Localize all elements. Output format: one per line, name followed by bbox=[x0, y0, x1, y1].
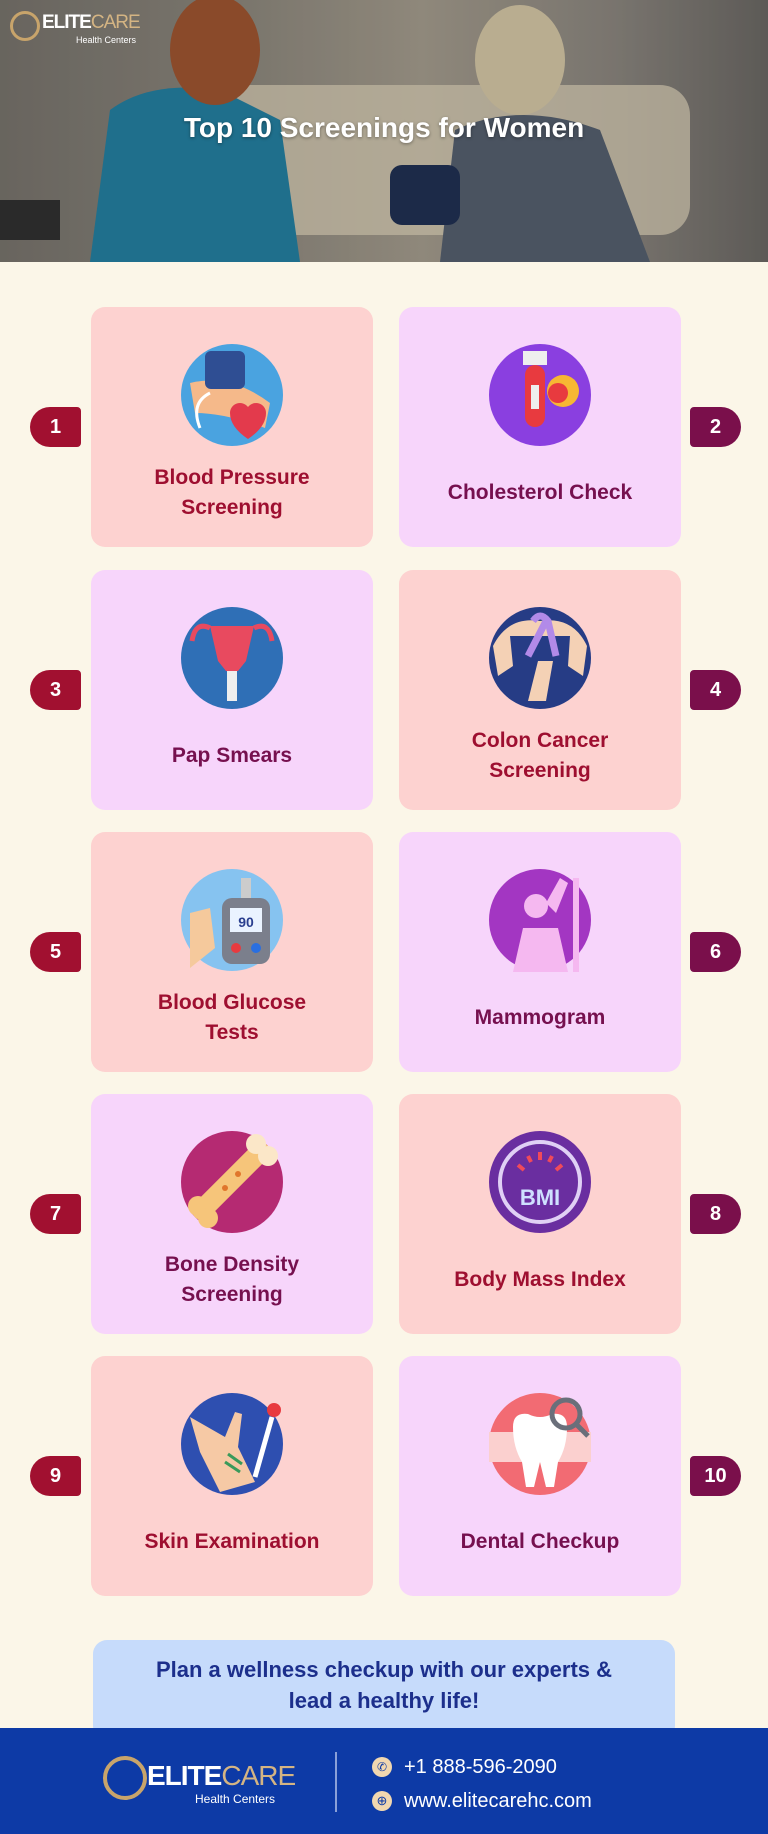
contact: web: ⊕ bbox=[377, 1793, 387, 1808]
callout: CTA: Plan a wellness checkup with our experts & bbox=[156, 1657, 612, 1682]
badge 6: 6 bbox=[710, 940, 721, 962]
icon: skin bbox=[181, 1393, 283, 1495]
label bbox=[472, 729, 608, 782]
badge 10 bbox=[690, 1456, 741, 1496]
icon: colon ribbon bbox=[489, 607, 591, 709]
logo: top bbox=[10, 11, 140, 45]
divider bbox=[335, 1752, 337, 1812]
hero photo bbox=[0, 0, 768, 262]
callout: CTA: lead a healthy life! bbox=[289, 1688, 479, 1713]
label: Colon Cancer bbox=[472, 729, 608, 752]
icon: blood pressure bbox=[181, 344, 283, 446]
footer logo bbox=[103, 1756, 295, 1806]
card 6 bbox=[399, 832, 681, 1072]
logo: top: Health Centers bbox=[76, 35, 136, 45]
badge 9 bbox=[30, 1456, 81, 1496]
card 3 bbox=[91, 570, 373, 810]
label: Body Mass Index bbox=[454, 1268, 626, 1291]
label: Pap Smears bbox=[172, 744, 292, 767]
card 1 bbox=[91, 307, 373, 547]
label: Cholesterol Check bbox=[448, 481, 632, 504]
icon: BMI gauge bbox=[489, 1131, 591, 1233]
label: Screening bbox=[181, 1283, 283, 1306]
label: Screening bbox=[489, 759, 591, 782]
icon: uterus bbox=[181, 607, 283, 709]
label: Dental Checkup bbox=[461, 1530, 619, 1553]
badge 6 bbox=[690, 932, 741, 972]
badge 5 bbox=[30, 932, 81, 972]
contact: phone: +1 888-596-2090 bbox=[404, 1756, 557, 1778]
icon: mammogram bbox=[489, 869, 591, 972]
label: Bone Density bbox=[165, 1253, 299, 1276]
card 8 bbox=[399, 1094, 681, 1334]
badge 7: 7 bbox=[50, 1202, 61, 1224]
badge 4 bbox=[690, 670, 741, 710]
badge 9: 9 bbox=[50, 1464, 61, 1486]
badge 1: 1 bbox=[50, 416, 61, 438]
icon: glucose meter bbox=[181, 869, 283, 971]
badge 1 bbox=[30, 407, 81, 447]
label bbox=[165, 1253, 299, 1306]
card 2 bbox=[399, 307, 681, 547]
icon: BMI gauge: BMI bbox=[520, 1185, 560, 1210]
card 9 bbox=[91, 1356, 373, 1596]
label: Blood Pressure bbox=[154, 466, 310, 489]
label: Blood Glucose bbox=[158, 991, 306, 1014]
card 4 bbox=[399, 570, 681, 810]
label: Skin Examination bbox=[144, 1530, 320, 1553]
card 10 bbox=[399, 1356, 681, 1596]
footer logo: Health Centers bbox=[195, 1792, 275, 1806]
label: Mammogram bbox=[475, 1006, 605, 1029]
label bbox=[154, 466, 310, 519]
footer logo: ELITECARE bbox=[147, 1760, 295, 1791]
badge 3: 3 bbox=[50, 678, 61, 700]
icon: cholesterol bbox=[489, 344, 591, 446]
icon: tooth bbox=[489, 1393, 591, 1495]
card 5 bbox=[91, 832, 373, 1072]
card 7 bbox=[91, 1094, 373, 1334]
badge 10: 10 bbox=[704, 1464, 727, 1486]
badge 8 bbox=[690, 1194, 741, 1234]
contact: web: www.elitecarehc.com bbox=[404, 1790, 592, 1812]
badge 8: 8 bbox=[710, 1202, 721, 1224]
icon: glucose meter: 90 bbox=[238, 914, 254, 930]
badge 7 bbox=[30, 1194, 81, 1234]
badge 4: 4 bbox=[710, 678, 721, 700]
badge 3 bbox=[30, 670, 81, 710]
badge 2: 2 bbox=[710, 416, 721, 438]
logo: top: ELITECARE bbox=[42, 12, 140, 33]
label: Tests bbox=[205, 1021, 259, 1044]
title: Top 10 Screenings for Women bbox=[184, 112, 584, 143]
label: Screening bbox=[181, 496, 283, 519]
badge 5: 5 bbox=[50, 940, 61, 962]
icon: bone bbox=[181, 1131, 283, 1233]
badge 2 bbox=[690, 407, 741, 447]
callout: CTA bbox=[93, 1640, 675, 1740]
contact: phone: ✆ bbox=[377, 1760, 387, 1774]
label bbox=[158, 991, 306, 1044]
footer bbox=[0, 1728, 768, 1834]
